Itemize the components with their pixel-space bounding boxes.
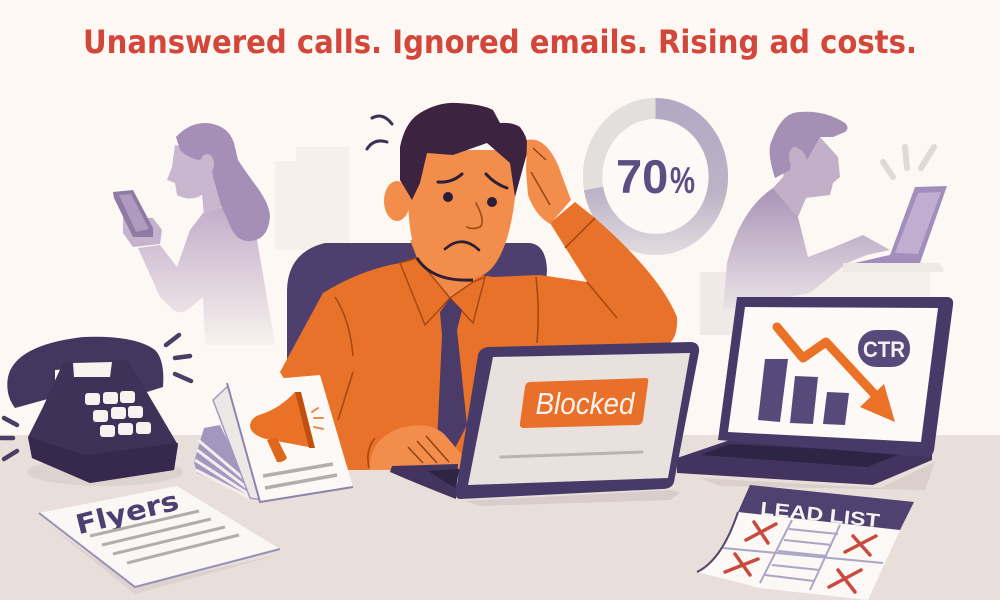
back laptop with falling CTR chart — [677, 297, 953, 490]
donut chart 70% — [593, 108, 718, 244]
hair — [400, 103, 528, 200]
lid — [456, 342, 699, 499]
ringing marks — [1, 335, 191, 459]
CTR pill — [858, 330, 910, 367]
screen — [73, 362, 112, 377]
stress marks — [367, 116, 392, 149]
back laptop with falling CTR chart: CTR — [863, 337, 905, 362]
fanned sheets — [194, 425, 255, 498]
lead list sheet: LEAD LIST — [759, 499, 881, 532]
body — [28, 360, 178, 483]
donut value: 70 — [616, 150, 668, 203]
hand on head — [526, 140, 571, 224]
ear — [384, 181, 410, 221]
tie — [437, 298, 467, 452]
text lines — [90, 511, 239, 563]
background woman with phone — [113, 123, 275, 345]
office chair — [287, 243, 547, 380]
red crosses — [725, 522, 876, 592]
stack of megaphone flyers — [194, 375, 353, 502]
background chair and desk — [700, 272, 742, 335]
neck — [410, 240, 495, 298]
shirt — [280, 202, 677, 470]
shadow — [27, 458, 183, 486]
icon: surprise ticks — [883, 147, 934, 177]
laptop shadow — [465, 490, 680, 506]
header — [738, 485, 914, 530]
sheet shadow — [48, 525, 285, 594]
keypad — [85, 391, 151, 437]
lead list sheet — [697, 485, 914, 600]
laptop shadow — [700, 462, 935, 490]
eyebrows, nose and mouth — [438, 174, 507, 250]
text lines — [263, 464, 337, 488]
face — [408, 150, 515, 280]
jawline — [417, 258, 473, 280]
desk — [0, 435, 1000, 600]
screen — [468, 353, 690, 485]
laptop keyboard base — [390, 464, 458, 499]
screen — [728, 307, 938, 442]
falling arrow — [777, 327, 877, 397]
background man on laptop — [723, 112, 947, 310]
flyers sheet — [39, 486, 285, 594]
handset — [7, 337, 163, 408]
front laptop blocked: Blocked — [536, 386, 636, 421]
collar — [400, 258, 485, 325]
flyers title: Flyers — [73, 486, 182, 541]
table grid — [723, 520, 883, 590]
front sheet — [227, 375, 353, 502]
donut chart 70%: % — [670, 160, 695, 201]
blocked badge — [520, 378, 648, 428]
hand on desk — [370, 425, 462, 470]
faint background building — [275, 147, 349, 250]
paper — [697, 512, 900, 600]
screen line — [501, 452, 642, 457]
laptop base — [677, 440, 932, 485]
bars — [758, 359, 788, 422]
shirt creases — [335, 218, 617, 468]
megaphone — [250, 392, 314, 448]
stressed man — [280, 103, 677, 470]
telephone — [7, 337, 183, 486]
title: Unanswered calls. Ignored emails. Rising ad costs. — [83, 23, 917, 61]
eyes — [443, 192, 453, 202]
front laptop blocked — [390, 342, 699, 506]
laptop lid — [718, 297, 953, 457]
